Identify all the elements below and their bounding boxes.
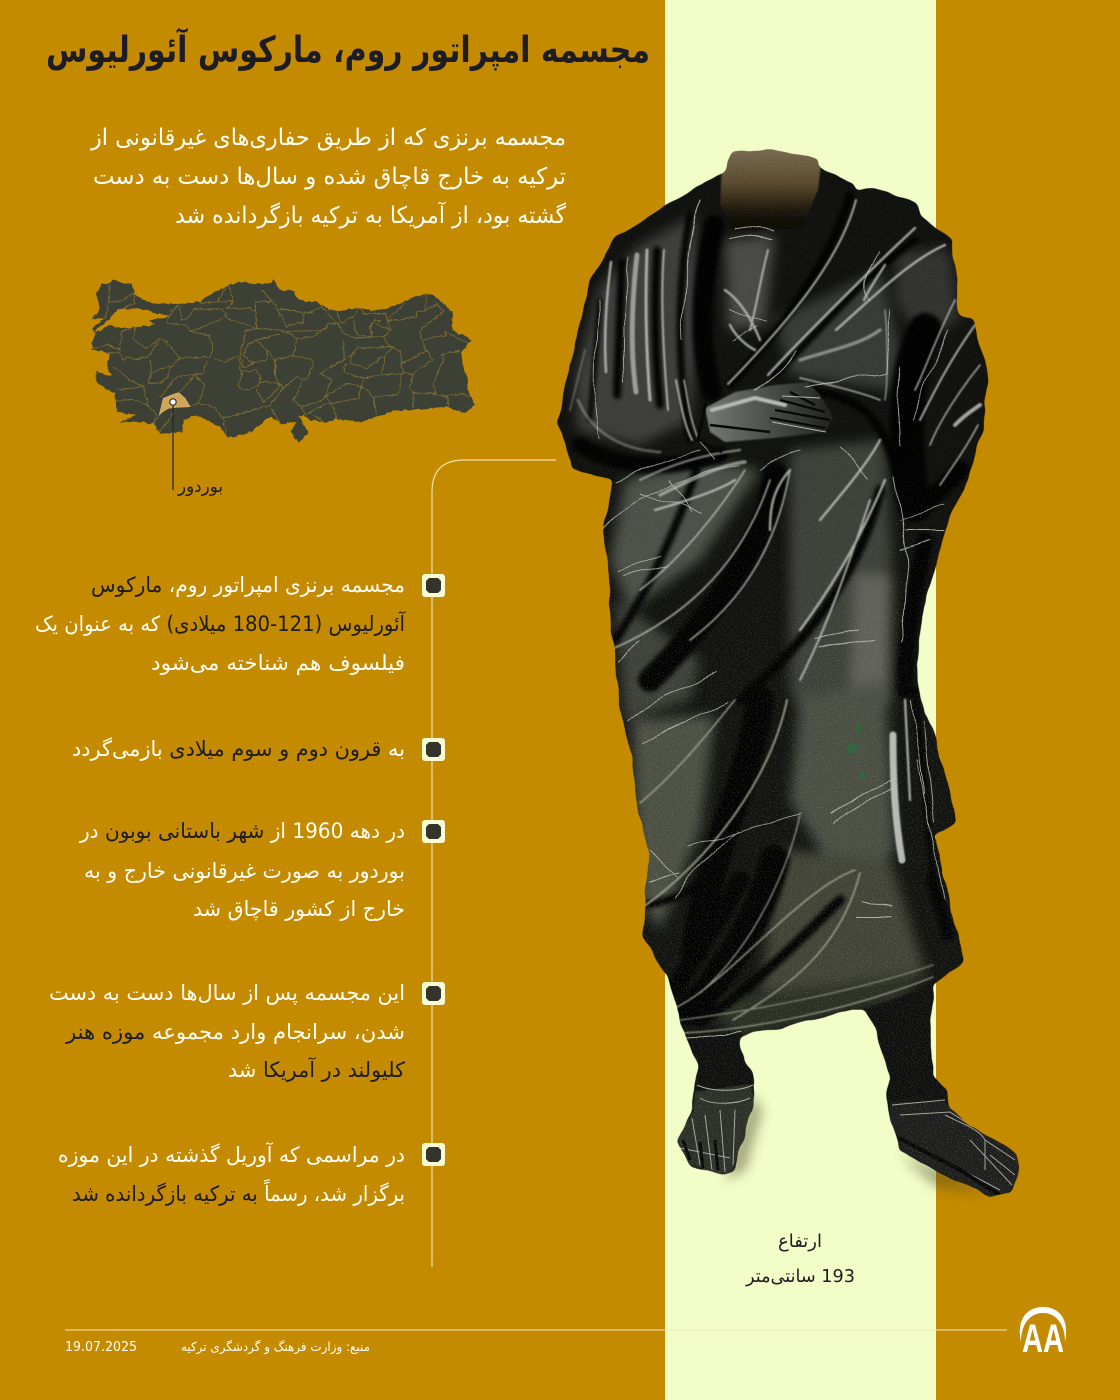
statue: patina grain <box>550 140 1030 1205</box>
list item 3: بوردور به صورت غیرقانونی خارج و به <box>84 859 405 884</box>
list item 1: آئورلیوس (121-180 میلادی) که به عنوان یک <box>35 611 406 636</box>
list item 5: در مراسمی که آوریل گذشته در این موزه <box>58 1142 405 1167</box>
list item 2: به قرون دوم و سوم میلادی بازمی‌گردد <box>72 737 405 761</box>
statue: left sandal <box>675 1084 755 1175</box>
footer date: 19.07.2025 <box>65 1340 137 1355</box>
list item 4: کلیولند در آمریکا شد <box>228 1057 405 1082</box>
statue: right sandal <box>890 1100 1018 1197</box>
list item 1: مجسمه برنزی امپراتور روم، مارکوس <box>91 573 405 597</box>
list item 3: در دهه 1960 از شهر باستانی بوبون در <box>79 819 405 843</box>
map: location dot <box>170 399 176 405</box>
connector line from statue to list <box>432 460 556 1267</box>
intro paragraph: ترکیه به خارج قاچاق شده و سال‌ها دست به دست <box>93 164 566 190</box>
list item 1 <box>35 573 406 676</box>
statue: hand and forearm <box>698 382 833 452</box>
height label: 193 سانتی‌متر <box>745 1266 855 1287</box>
footer rule <box>65 1329 1007 1331</box>
height label <box>745 1231 855 1287</box>
statue cast shadows <box>725 1095 985 1195</box>
intro paragraph: مجسمه برنزی که از طریق حفاری‌های غیرقانونی از <box>90 125 566 151</box>
pale central panel <box>665 0 936 1400</box>
statue: verdigris spots <box>847 722 865 779</box>
list item 5: برگزار شد، رسماً به ترکیه بازگردانده شد <box>72 1178 405 1206</box>
statue: black fold shadows <box>580 195 960 1022</box>
list item 5 <box>58 1142 405 1206</box>
title: مجسمه امپراتور روم، مارکوس آئورلیوس <box>46 27 650 71</box>
timeline markers <box>422 574 445 1166</box>
intro paragraph: گشته بود، از آمریکا به ترکیه بازگردانده شد <box>175 201 566 229</box>
footer source: منبع: وزارت فرهنگ و گردشگری ترکیه <box>181 1339 370 1355</box>
list item 4 <box>49 981 405 1082</box>
map of Turkey with Burdur marked <box>92 279 475 490</box>
list item 1: فیلسوف هم شناخته می‌شود <box>151 651 405 676</box>
statue: specular highlights <box>570 200 980 1033</box>
height label: ارتفاع <box>778 1231 822 1252</box>
Anadolu Agency logo <box>1020 1307 1066 1361</box>
Anadolu Agency logo: AA <box>1022 1317 1064 1361</box>
statue: fine fold lines <box>595 200 950 1037</box>
list item 3: خارج از کشور قاچاق شد <box>193 897 405 922</box>
list item 4: شدن، سرانجام وارد مجموعه موزه هنر <box>65 1020 405 1044</box>
statue: broken neck core <box>720 144 822 230</box>
map: country and provinces <box>92 279 475 443</box>
map: Burdur province <box>159 393 190 415</box>
statue: legs <box>730 989 922 1040</box>
list item 3 <box>79 819 405 922</box>
list item 4: این مجسمه پس از سال‌ها دست به دست <box>49 981 405 1005</box>
bronze statue of Marcus Aurelius <box>550 140 1030 1205</box>
map: leader line <box>172 402 174 490</box>
intro paragraph <box>90 125 566 229</box>
map label: Burdur: بوردور <box>177 477 223 497</box>
statue: broad tonal modelling <box>575 215 960 1037</box>
